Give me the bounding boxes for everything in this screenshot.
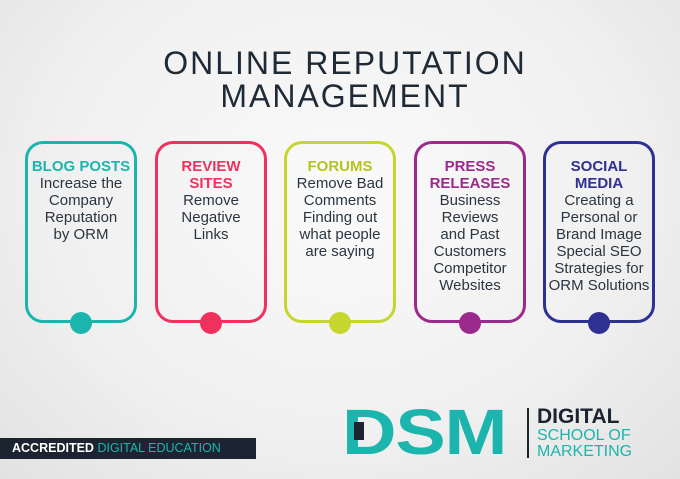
panel: blog posts: Reputation <box>45 209 117 226</box>
panel: social media: Brand Image <box>556 226 642 243</box>
badge: accredited <box>0 438 256 459</box>
panel: press releases: Customers <box>434 243 506 260</box>
panel: press releases: Competitor <box>433 260 507 277</box>
panel: blog posts <box>25 141 137 323</box>
panel: review sites: SITES <box>189 175 233 192</box>
logo: DSM <box>342 396 632 468</box>
panel: forums: FORUMS <box>308 158 372 175</box>
panel: social media: ORM Solutions <box>549 277 649 294</box>
panel: review sites <box>155 141 267 323</box>
panel: press releases: Reviews <box>442 209 498 226</box>
panel: forums: what people <box>300 226 380 243</box>
panel: forums: Finding out <box>303 209 377 226</box>
badge: accredited: ACCREDITED DIGITAL EDUCATION <box>12 441 221 455</box>
panel: social media: Special SEO <box>556 243 642 260</box>
panel: social media <box>543 141 655 323</box>
panel: press releases: RELEASES <box>430 175 510 192</box>
panel: blog posts: Company <box>49 192 113 209</box>
panel: social media: MEDIA <box>575 175 623 192</box>
panel: blog posts: BLOG POSTS <box>32 158 130 175</box>
panel: forums: Comments <box>304 192 376 209</box>
panel: blog posts: Increase the <box>40 175 122 192</box>
panel: press releases: Business <box>440 192 500 209</box>
panel: press releases: PRESS <box>445 158 495 175</box>
panel: social media: Personal or <box>561 209 637 226</box>
panel: review sites: Remove <box>183 192 239 209</box>
logo: DSM: DSM <box>342 396 506 468</box>
panel: forums <box>284 141 396 323</box>
panel: social media: Creating a <box>564 192 634 209</box>
panel: social media: SOCIAL <box>571 158 627 175</box>
panel: forums: are saying <box>305 243 375 260</box>
panel: review sites: Links <box>193 226 229 243</box>
logo: DSM: DIGITAL <box>537 405 619 428</box>
panel: press releases: Websites <box>439 277 501 294</box>
panel: press releases: and Past <box>440 226 500 243</box>
panel: review sites: Negative <box>181 209 241 226</box>
logo: DSM: MARKETING <box>537 443 632 460</box>
panel: forums: Remove Bad <box>297 175 383 192</box>
logo: DSM: SCHOOL OF <box>537 427 631 444</box>
title <box>163 45 527 114</box>
title: MANAGEMENT <box>220 78 470 114</box>
panel: review sites: REVIEW <box>181 158 241 175</box>
title: ONLINE REPUTATION <box>163 45 527 81</box>
panel: blog posts: by ORM <box>53 226 108 243</box>
panel: social media: Strategies for <box>554 260 644 277</box>
panel: press releases <box>414 141 526 323</box>
